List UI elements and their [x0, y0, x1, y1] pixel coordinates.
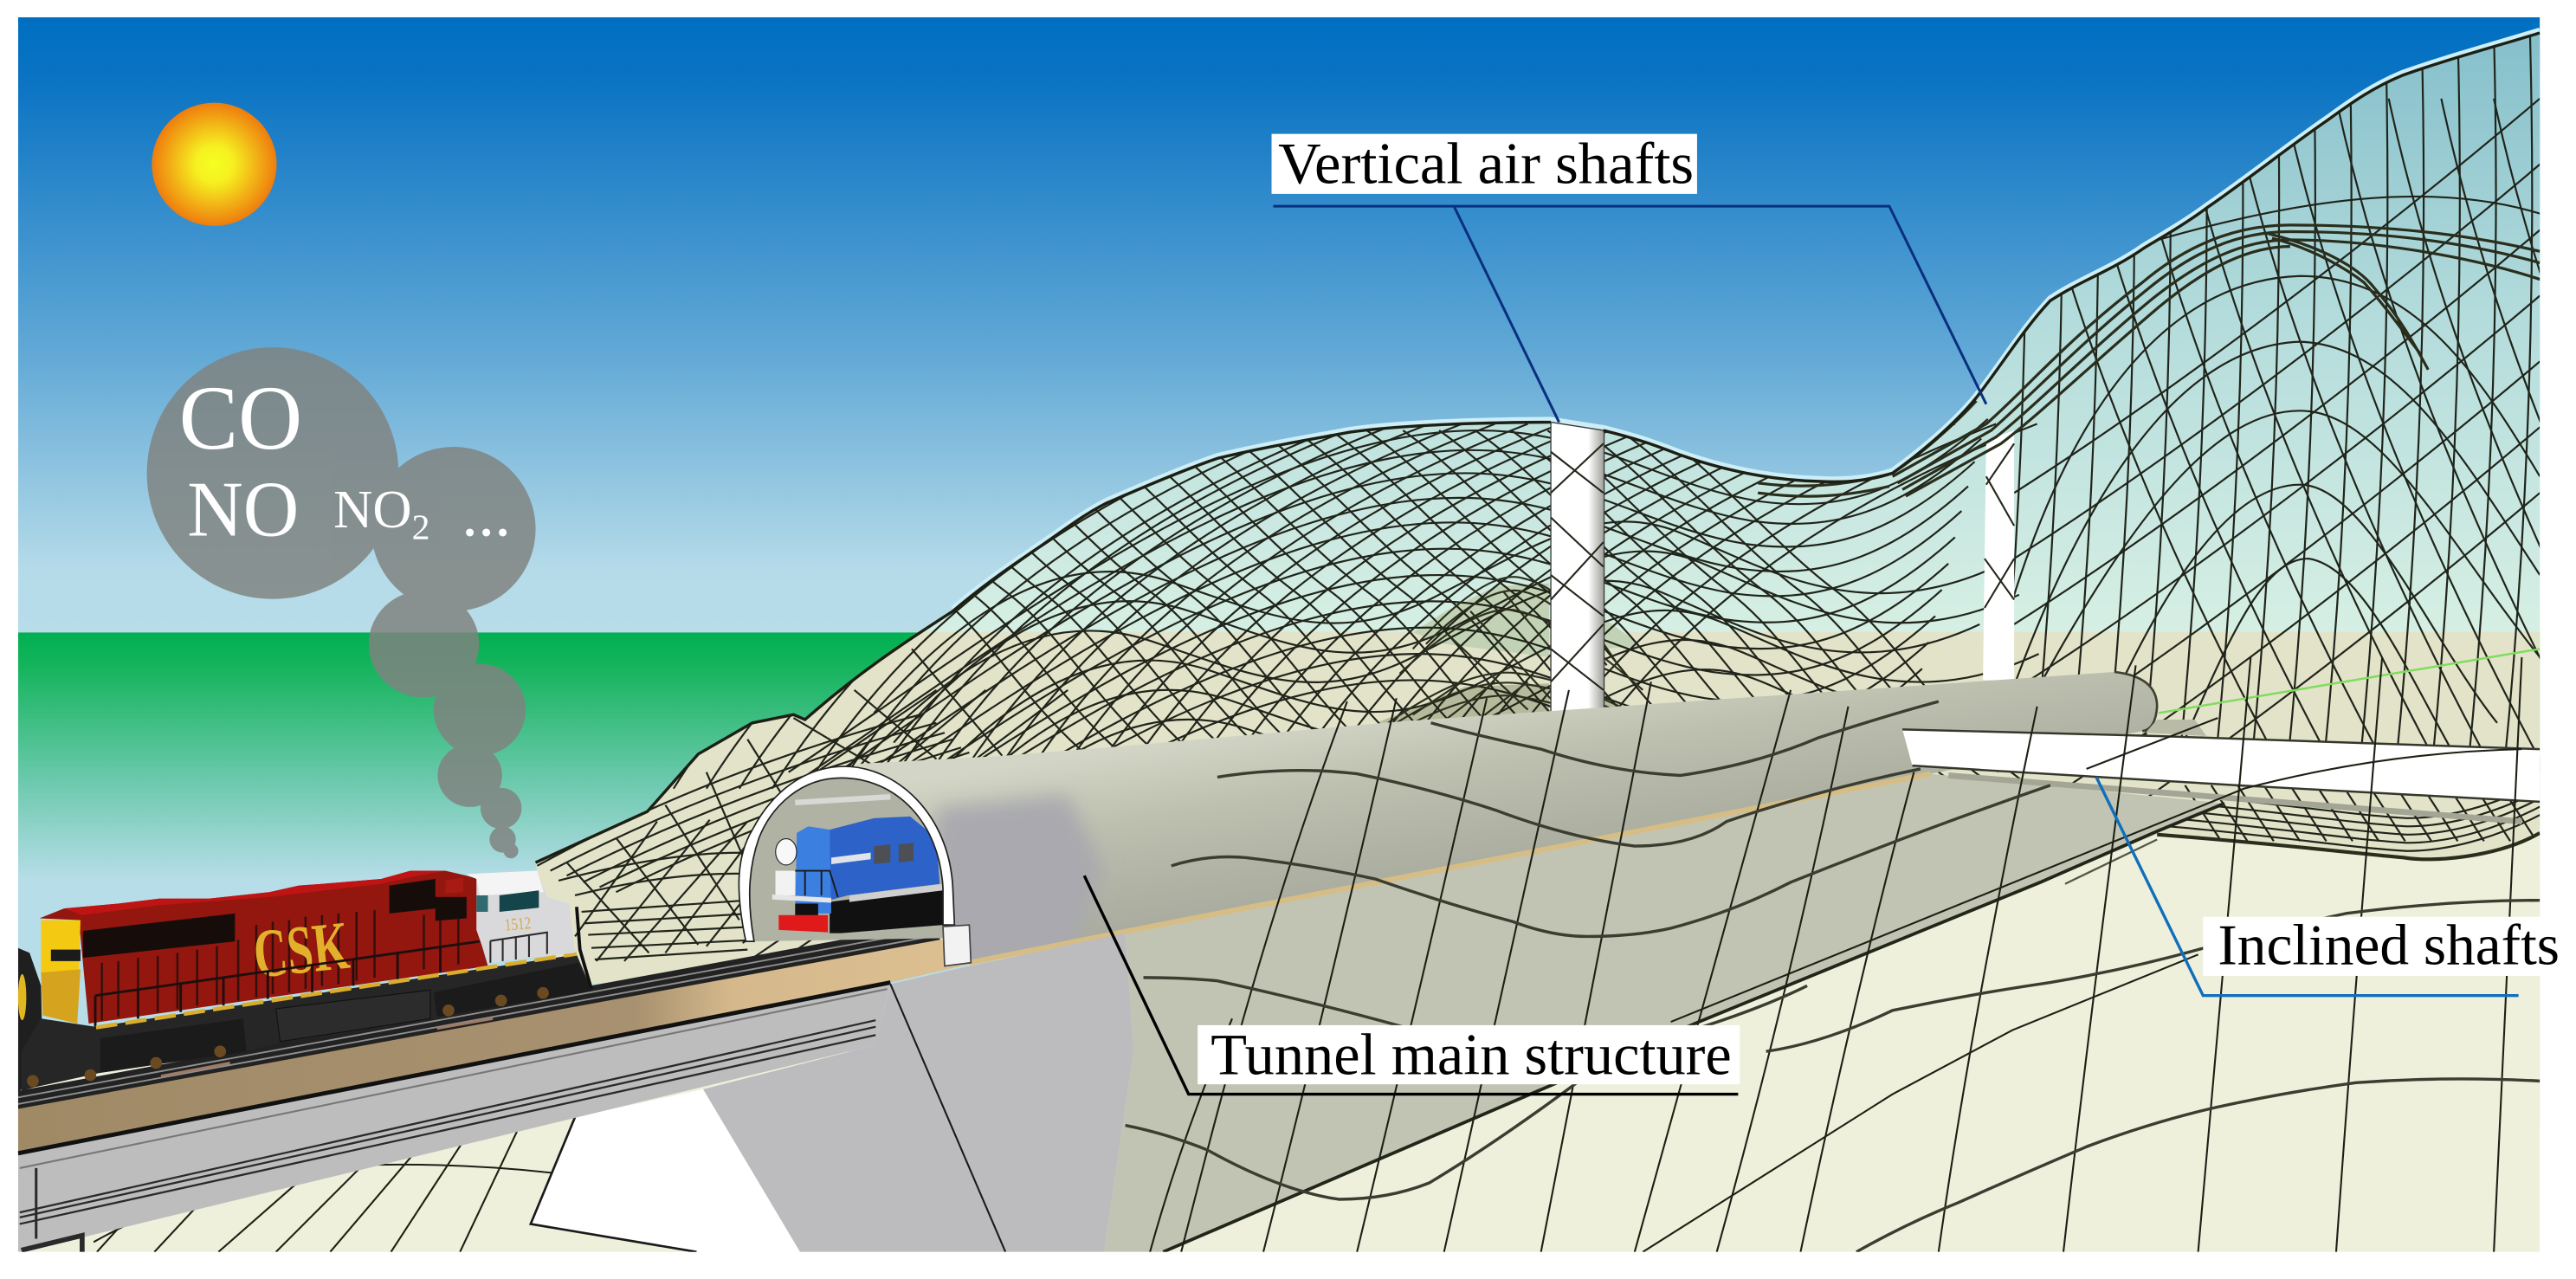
front terrain: [1163, 833, 2540, 1252]
opening outline: [531, 1117, 696, 1252]
label text: Inclined shafts: [2218, 914, 2560, 978]
smoke label NO2: NO: [333, 479, 412, 539]
black hood panel: [83, 914, 235, 958]
black rear panel: [390, 879, 467, 920]
grey bump behind tube end: [2146, 720, 2206, 736]
vertical air shaft 1: [1551, 423, 1604, 713]
smoke plume: [147, 347, 536, 858]
white lamp: [776, 839, 797, 865]
rising line family: [641, 423, 2037, 789]
lower left terrain: [18, 1051, 1152, 1252]
green axis line: [2159, 649, 2540, 713]
portal ring: [739, 766, 954, 941]
smoke label NO: NO: [187, 466, 299, 552]
bridge girder: [18, 983, 890, 1252]
green ground band: [18, 632, 2540, 1126]
wavy contour family: [861, 520, 2039, 764]
rear hood windows: [445, 877, 463, 894]
right hill rising lines: [2014, 98, 2540, 797]
fuel tank: [276, 990, 430, 1042]
white front bar: [772, 895, 831, 903]
label text: Vertical air shafts: [1278, 131, 1694, 197]
dense ridge lines on hills: [1758, 225, 2540, 496]
leader line: inclined shafts: [2096, 777, 2519, 996]
mesh below inclined shaft: [2168, 782, 2540, 851]
right hill meridians: [1998, 33, 2568, 772]
track band: [18, 921, 939, 1109]
sun: [152, 103, 277, 226]
wagon behind: [18, 948, 42, 1093]
inclined shaft edges: [1902, 729, 2540, 802]
inner small hill lines: [1388, 577, 1651, 723]
undercarriage: [22, 954, 591, 1091]
smoke label ellipsis: ...: [462, 478, 511, 550]
tan railway bed: [18, 938, 969, 1153]
hill surface: [536, 33, 2540, 985]
rails: [18, 928, 939, 1104]
label box: [2203, 917, 2560, 976]
red hood: [40, 871, 488, 1024]
wheels: [27, 987, 549, 1087]
leader line: vertical air shafts: [1273, 206, 1986, 423]
railway tracks: [18, 921, 939, 1109]
hill halo: [952, 30, 2540, 609]
blue nose: [795, 826, 831, 914]
white side bar: [849, 884, 943, 902]
yellow walkway dashes: [96, 954, 577, 1028]
dark underframe: [830, 888, 943, 933]
tan tunnel floor line: [969, 774, 1930, 963]
foreground mesh contour lines: [1126, 701, 2540, 1252]
concrete pier: [703, 933, 1133, 1252]
sky gradient: [18, 17, 2540, 633]
cab windows: [500, 890, 539, 912]
pier edge line: [890, 984, 1005, 1252]
foreground mesh longitudinal lines: [1150, 657, 2521, 1252]
red bumper: [778, 915, 828, 933]
label: inclined shafts: [2203, 914, 2560, 978]
portal interior: [750, 778, 943, 941]
right hill falling lines: [2071, 99, 2540, 762]
side stripe: [831, 853, 871, 864]
shadow under inclined shaft: [1948, 775, 2521, 822]
rear bogie: [100, 1018, 247, 1073]
vertical air shaft 2: [1983, 430, 2014, 680]
front railing: [577, 907, 591, 989]
nose number plate: [51, 950, 81, 961]
cab number: 1512: [504, 914, 532, 935]
cab lower slats: [490, 933, 547, 963]
girder stripes: [20, 989, 888, 1252]
terrain edge line: [1163, 804, 2224, 1252]
front bogie: [434, 963, 591, 1017]
label: tunnel main structure: [1198, 1021, 1740, 1087]
lower inner hill shade: [1377, 683, 1628, 723]
upper inner hill shade: [1413, 584, 1641, 657]
red hood vertical stripes: [102, 910, 458, 1020]
white opening polygon under deck: [531, 1089, 800, 1252]
handrail: [95, 941, 480, 1027]
yellow nose lower: [41, 969, 81, 1024]
cab side window: [476, 895, 488, 912]
label box: [1272, 134, 1697, 194]
top red highlight: [64, 871, 445, 915]
mesh lines across shafts: [1551, 443, 2014, 690]
ridge outline: [536, 33, 2540, 862]
CSX locomotive: [18, 871, 591, 1093]
right hill nested humps: [1996, 197, 2540, 772]
dark buffer: [795, 903, 818, 917]
tunnel tube main structure: [856, 672, 2157, 965]
lower left terrain mesh: [94, 1130, 553, 1252]
label text: Tunnel main structure: [1211, 1021, 1732, 1087]
blue locomotive in tunnel: [772, 797, 943, 933]
grey cab: [467, 871, 575, 963]
white post at portal: [943, 925, 971, 966]
inner small hills shading: [1377, 584, 1641, 723]
front handrail: [795, 871, 838, 897]
brake pads: [161, 1018, 493, 1076]
low left mesh: [537, 649, 1068, 961]
smoke label NO2: 2: [412, 507, 429, 547]
deck edge: [18, 983, 890, 1153]
ceiling pipe: [795, 797, 890, 803]
smoke label CO: CO: [179, 366, 302, 468]
cab white roof: [467, 871, 544, 895]
hill wireframe mesh: [537, 33, 2576, 1022]
secondary terrain edge line: [2065, 839, 2157, 884]
yellow nose: [41, 920, 81, 1024]
contour line family: [742, 418, 1988, 956]
bottom mesh curve on right hill: [2157, 833, 2540, 859]
label box: [1198, 1025, 1740, 1084]
leader line: tunnel main structure: [1084, 875, 1738, 1095]
tube end outline: [2114, 672, 2157, 731]
falling line family: [956, 430, 2021, 778]
blue rear body: [830, 817, 939, 901]
yellow CSK lettering: CSK: [250, 908, 352, 993]
label: vertical air shafts: [1272, 131, 1697, 197]
inclined shaft: [1902, 729, 2540, 802]
grey tunnel entrance wall: [936, 795, 1104, 978]
foreground grey slope: [1104, 774, 2224, 1252]
white front panel: [776, 871, 795, 895]
wagon yellow oval: [18, 974, 26, 1020]
side windows: [874, 843, 914, 864]
